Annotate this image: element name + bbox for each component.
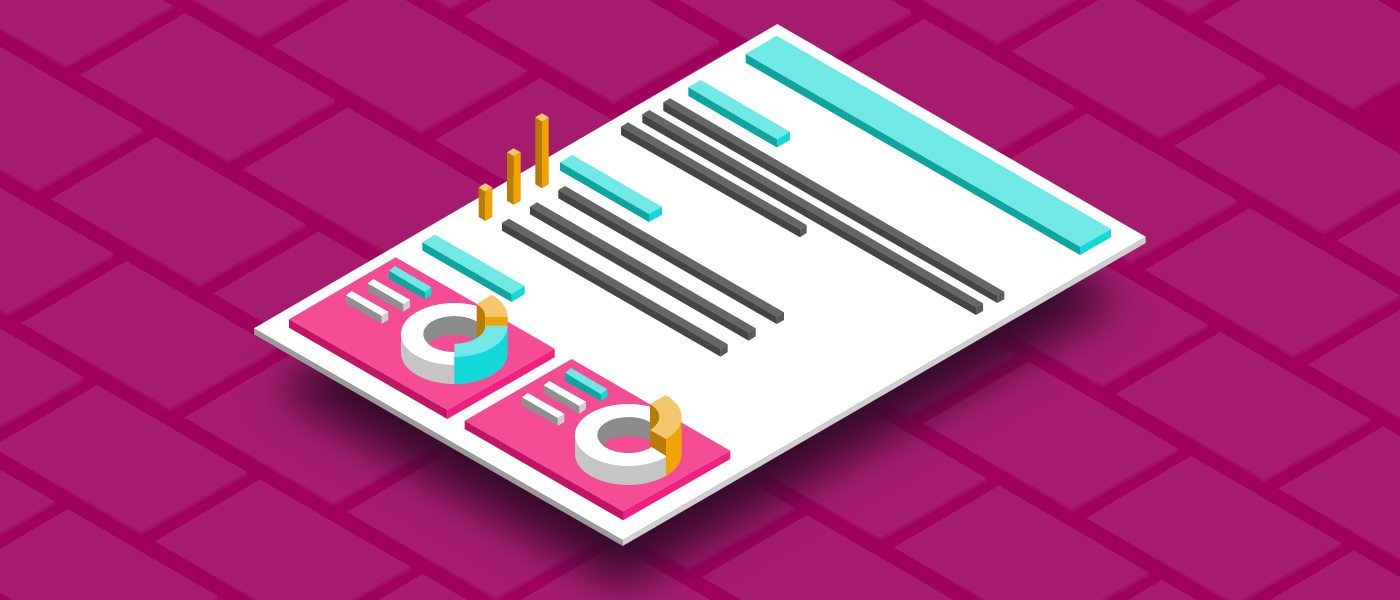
panel: dashboard card 2 (465, 359, 730, 520)
legend bars card 2 (522, 368, 607, 426)
heading bar (746, 36, 1111, 255)
text line bars group 2 (502, 186, 784, 357)
subheading bar 3 (422, 235, 525, 302)
donut chart card 1 (401, 295, 508, 384)
page drop shadow (275, 100, 1120, 587)
bar chart columns (479, 113, 549, 221)
panel: dashboard card 1 (289, 257, 555, 419)
subheading bar 1 (688, 80, 790, 148)
legend bars card 1 (346, 266, 431, 324)
subheading bar 2 (560, 155, 662, 222)
document page (254, 24, 1146, 546)
donut chart card 2 (575, 395, 682, 485)
text line bars group 1 (621, 98, 1004, 315)
